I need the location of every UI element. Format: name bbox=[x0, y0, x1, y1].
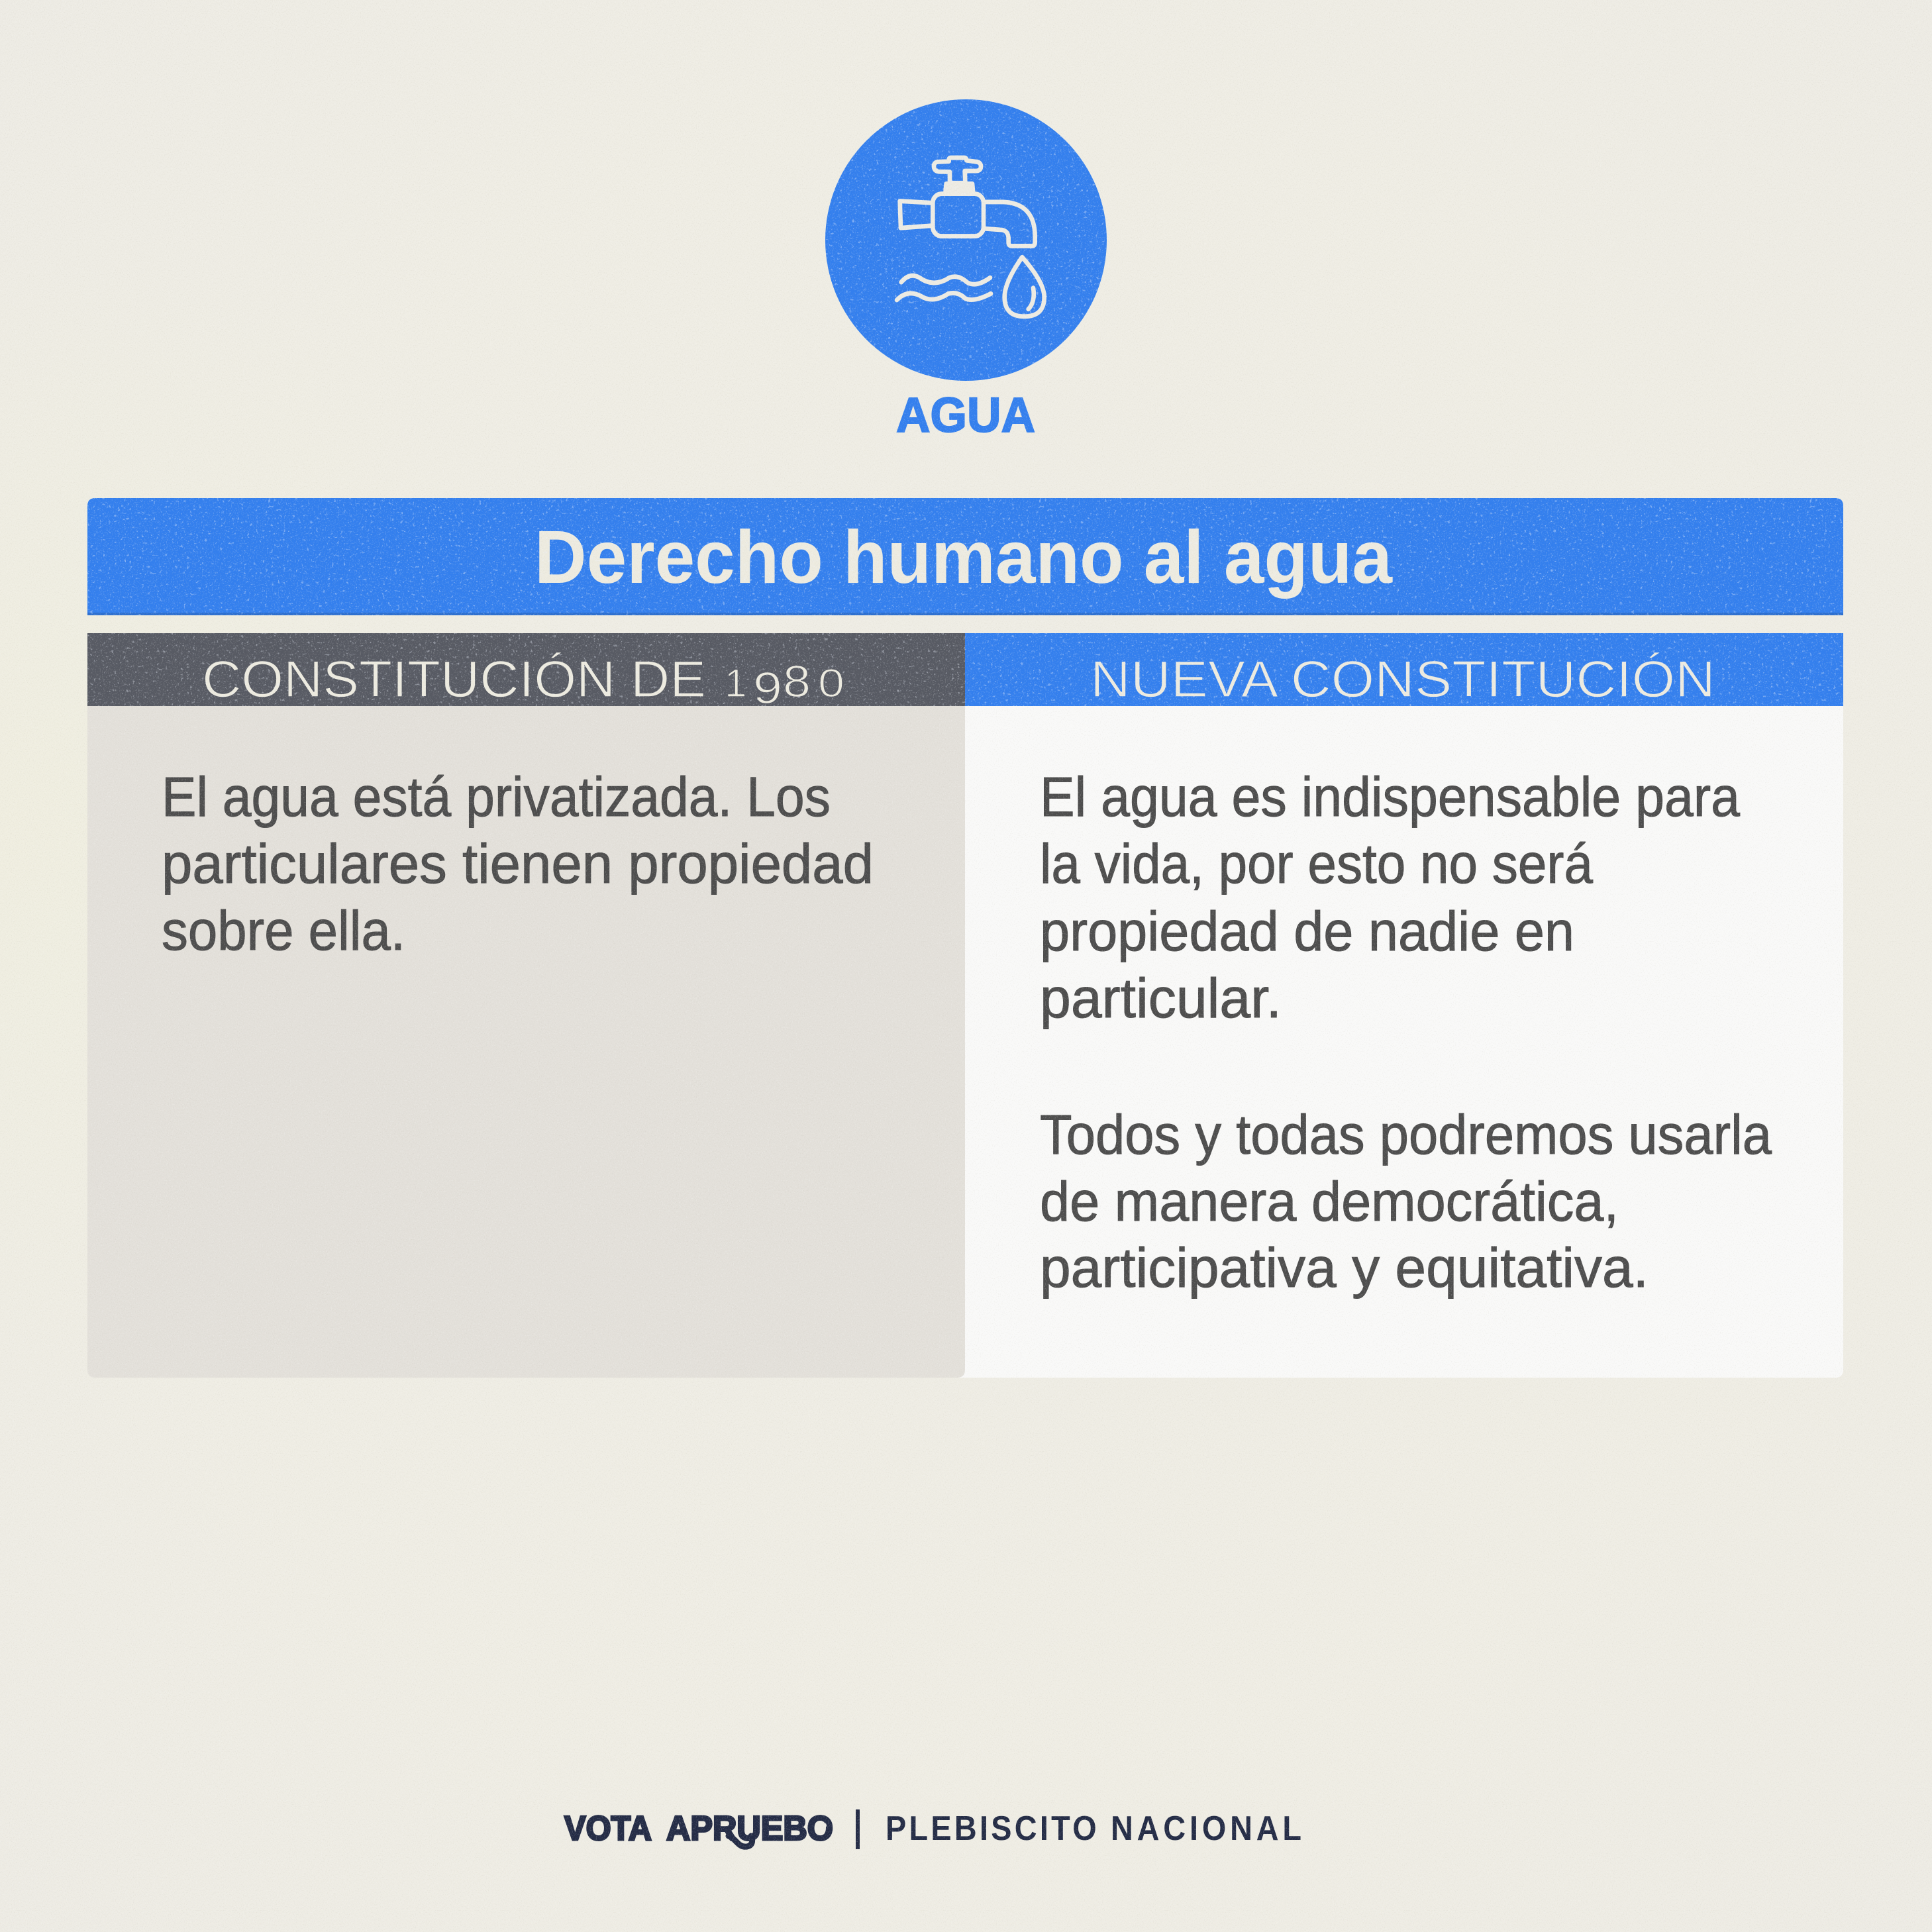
text block: 1980 body: sobre ella. bbox=[162, 899, 405, 962]
panel: Constitución de 1980 bbox=[87, 633, 965, 1378]
column header: Constitución de 1980: 8 bbox=[783, 656, 811, 707]
title banner: Derecho humano al agua bbox=[534, 515, 1393, 599]
column header: Constitución de 1980 bbox=[87, 633, 965, 713]
icon: blue circle with water tap bbox=[825, 99, 1107, 381]
text block: nueva constitución paragraph 2: de manera democrática, bbox=[1040, 1170, 1619, 1233]
text block: nueva constitución paragraph 1 bbox=[1040, 766, 1740, 1029]
text block: nueva constitución paragraph 2: Todos y todas podremos usarla bbox=[1040, 1103, 1772, 1166]
text block: nueva constitución paragraph 2: participativa y equitativa. bbox=[1040, 1237, 1649, 1299]
heading: AGUA: AGUA bbox=[896, 387, 1035, 442]
divider bar bbox=[856, 1809, 860, 1849]
title banner bbox=[87, 498, 1843, 615]
text block: 1980 body: particulares tienen propiedad bbox=[162, 833, 874, 895]
logo: Vota Apruebo: VOTA bbox=[564, 1809, 652, 1848]
column header: Constitución de 1980: 1 bbox=[725, 661, 746, 705]
footer bbox=[564, 1809, 1301, 1849]
text: Plebiscito Nacional: NACIONAL bbox=[1111, 1809, 1301, 1848]
text block: nueva constitución paragraph 1: la vida, por esto no será bbox=[1040, 833, 1593, 895]
logo: Vota Apruebo bbox=[564, 1809, 833, 1848]
text: Plebiscito Nacional: PLEBISCITO bbox=[886, 1809, 1097, 1848]
text block: nueva constitución paragraph 1: El agua es indispensable para bbox=[1040, 766, 1740, 828]
text block: nueva constitución paragraph 1: propiedad de nadie en bbox=[1040, 900, 1574, 962]
text: Plebiscito Nacional bbox=[886, 1809, 1301, 1848]
text block: 1980 body: El agua está privatizada. Los bbox=[162, 766, 831, 828]
text block: 1980 body bbox=[162, 766, 874, 962]
text block: nueva constitución paragraph 1: particular. bbox=[1040, 967, 1282, 1029]
column header: Nueva Constitución: NUEVA CONSTITUCIÓN bbox=[1090, 650, 1715, 708]
panel: Nueva Constitución bbox=[957, 633, 1843, 1378]
column header: Constitución de 1980: 9 bbox=[753, 663, 782, 713]
column header: Constitución de 1980: 0 bbox=[818, 661, 844, 705]
logo: Vota Apruebo: APRUEBO bbox=[666, 1809, 833, 1848]
column header: Nueva Constitución bbox=[965, 633, 1843, 708]
column header: Constitución de 1980: CONSTITUCIÓN DE bbox=[202, 650, 706, 708]
text block: nueva constitución paragraph 2 bbox=[1040, 1103, 1772, 1299]
